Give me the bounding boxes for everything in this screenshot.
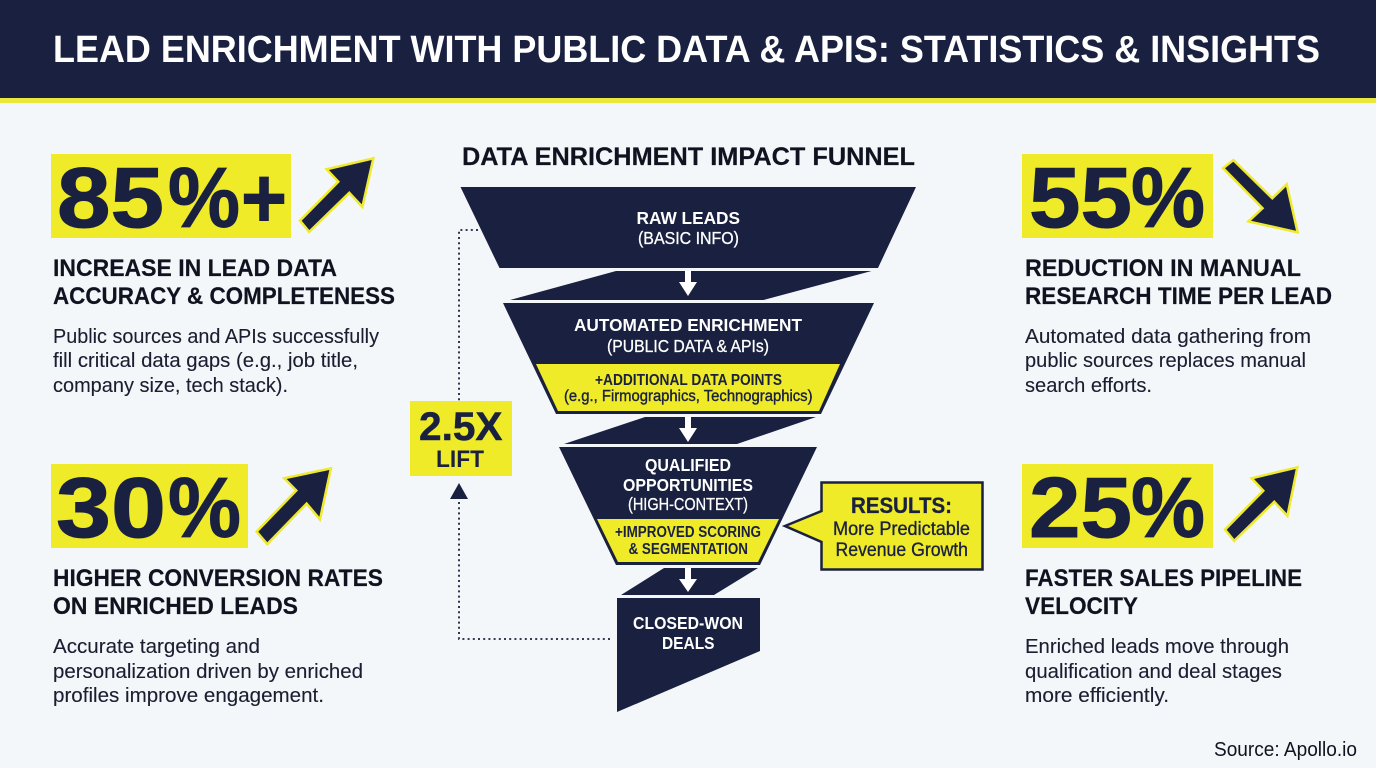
stat description: company size, tech stack). <box>53 374 288 397</box>
stat description: public sources replaces manual <box>1025 349 1306 372</box>
panel: 55% stat: 55 <box>1029 151 1132 246</box>
panel: 25% stat: % <box>1131 461 1205 556</box>
stat heading <box>1025 255 1332 310</box>
icon: down arrow <box>1225 162 1296 231</box>
panel: 25% stat: 25 <box>1029 461 1132 556</box>
funnel stage: automated enrichment <box>503 303 874 414</box>
icon: up arrow <box>302 160 372 230</box>
feedback loop: dotted arrow <box>450 230 610 639</box>
funnel heading: DATA ENRICHMENT IMPACT FUNNEL <box>462 143 915 171</box>
panel: 85% stat: 85 <box>57 151 164 246</box>
panel: 85% stat: + <box>241 151 287 246</box>
funnel stage: raw leads <box>460 187 916 268</box>
stat heading: ACCURACY & COMPLETENESS <box>53 283 395 310</box>
panel: 25% stat <box>1022 461 1302 707</box>
panel: 30% stat: 30 <box>56 461 166 556</box>
lift badge: LIFT <box>436 446 484 473</box>
stat description: search efforts. <box>1025 374 1152 397</box>
stat description: Enriched leads move through <box>1025 635 1289 658</box>
stat heading: REDUCTION IN MANUAL <box>1025 255 1301 282</box>
icon: up arrow <box>258 470 329 542</box>
stat heading: VELOCITY <box>1025 593 1138 620</box>
funnel stage: raw leads: (BASIC INFO) <box>638 228 739 248</box>
stat description: more efficiently. <box>1025 684 1169 707</box>
panel: 30% stat <box>51 461 383 707</box>
stat description: profiles improve engagement. <box>53 684 324 707</box>
stat description: qualification and deal stages <box>1025 660 1282 683</box>
funnel stage: qualified opportunities <box>559 447 817 565</box>
panel: 55% stat: % <box>1131 151 1205 246</box>
connector arrow 2 <box>564 417 816 444</box>
stat description <box>1025 635 1289 707</box>
funnel stage: qualified opportunities: QUALIFIED <box>645 455 731 475</box>
stat description: Automated data gathering from <box>1025 325 1311 348</box>
lift badge: 2.5X <box>419 405 503 449</box>
funnel stage: closed-won deals <box>617 598 760 712</box>
stat heading: FASTER SALES PIPELINE <box>1025 565 1302 592</box>
title banner <box>0 0 1376 103</box>
callout: results <box>785 482 982 570</box>
callout: results: More Predictable <box>833 518 970 540</box>
stat heading: HIGHER CONVERSION RATES <box>53 565 383 592</box>
panel: 85% stat: % <box>168 151 240 246</box>
source note: Source: Apollo.io <box>1214 739 1357 761</box>
panel: 55% stat <box>1022 151 1332 397</box>
funnel stage: automated enrichment: +ADDITIONAL DATA POINTS <box>595 372 782 389</box>
stat heading <box>1025 565 1302 620</box>
connector arrow 3 <box>621 568 758 595</box>
panel: 85% stat <box>51 151 395 397</box>
icon: up arrow <box>1227 469 1296 539</box>
stat description: Accurate targeting and <box>53 635 260 658</box>
stat description: personalization driven by enriched <box>53 660 363 683</box>
connector arrow 1 <box>510 271 872 300</box>
funnel stage: qualified opportunities: OPPORTUNITIES <box>623 475 753 495</box>
stat heading: RESEARCH TIME PER LEAD <box>1025 283 1332 310</box>
stat heading <box>53 255 395 310</box>
funnel chart <box>460 187 916 712</box>
funnel stage: raw leads: RAW LEADS <box>636 208 740 228</box>
funnel stage: qualified opportunities: (HIGH-CONTEXT) <box>628 494 748 514</box>
panel: 30% stat: % <box>168 461 241 556</box>
stat heading: ON ENRICHED LEADS <box>53 593 298 620</box>
stat heading <box>53 565 383 620</box>
funnel stage: automated enrichment: (e.g., Firmographics, Technographics) <box>564 388 812 405</box>
stat description: Public sources and APIs successfully <box>53 325 380 348</box>
stat description <box>53 325 380 397</box>
stat description <box>1025 325 1311 397</box>
funnel stage: qualified opportunities: & SEGMENTATION <box>628 541 748 558</box>
callout: results: RESULTS: <box>851 493 952 518</box>
lift badge <box>410 401 512 476</box>
stat heading: INCREASE IN LEAD DATA <box>53 255 337 282</box>
funnel stage: closed-won deals: DEALS <box>662 633 714 653</box>
stat description: fill critical data gaps (e.g., job title, <box>53 349 358 372</box>
callout: results: Revenue Growth <box>836 539 968 561</box>
funnel stage: closed-won deals: CLOSED-WON <box>633 613 743 633</box>
stat description <box>53 635 363 707</box>
funnel stage: qualified opportunities: +IMPROVED SCORING <box>615 524 761 541</box>
funnel stage: automated enrichment: (PUBLIC DATA & APIs) <box>607 336 769 356</box>
funnel stage: automated enrichment: AUTOMATED ENRICHMENT <box>574 315 802 335</box>
title: LEAD ENRICHMENT WITH PUBLIC DATA & APIS: STATISTICS & INSIGHTS <box>53 29 1320 71</box>
